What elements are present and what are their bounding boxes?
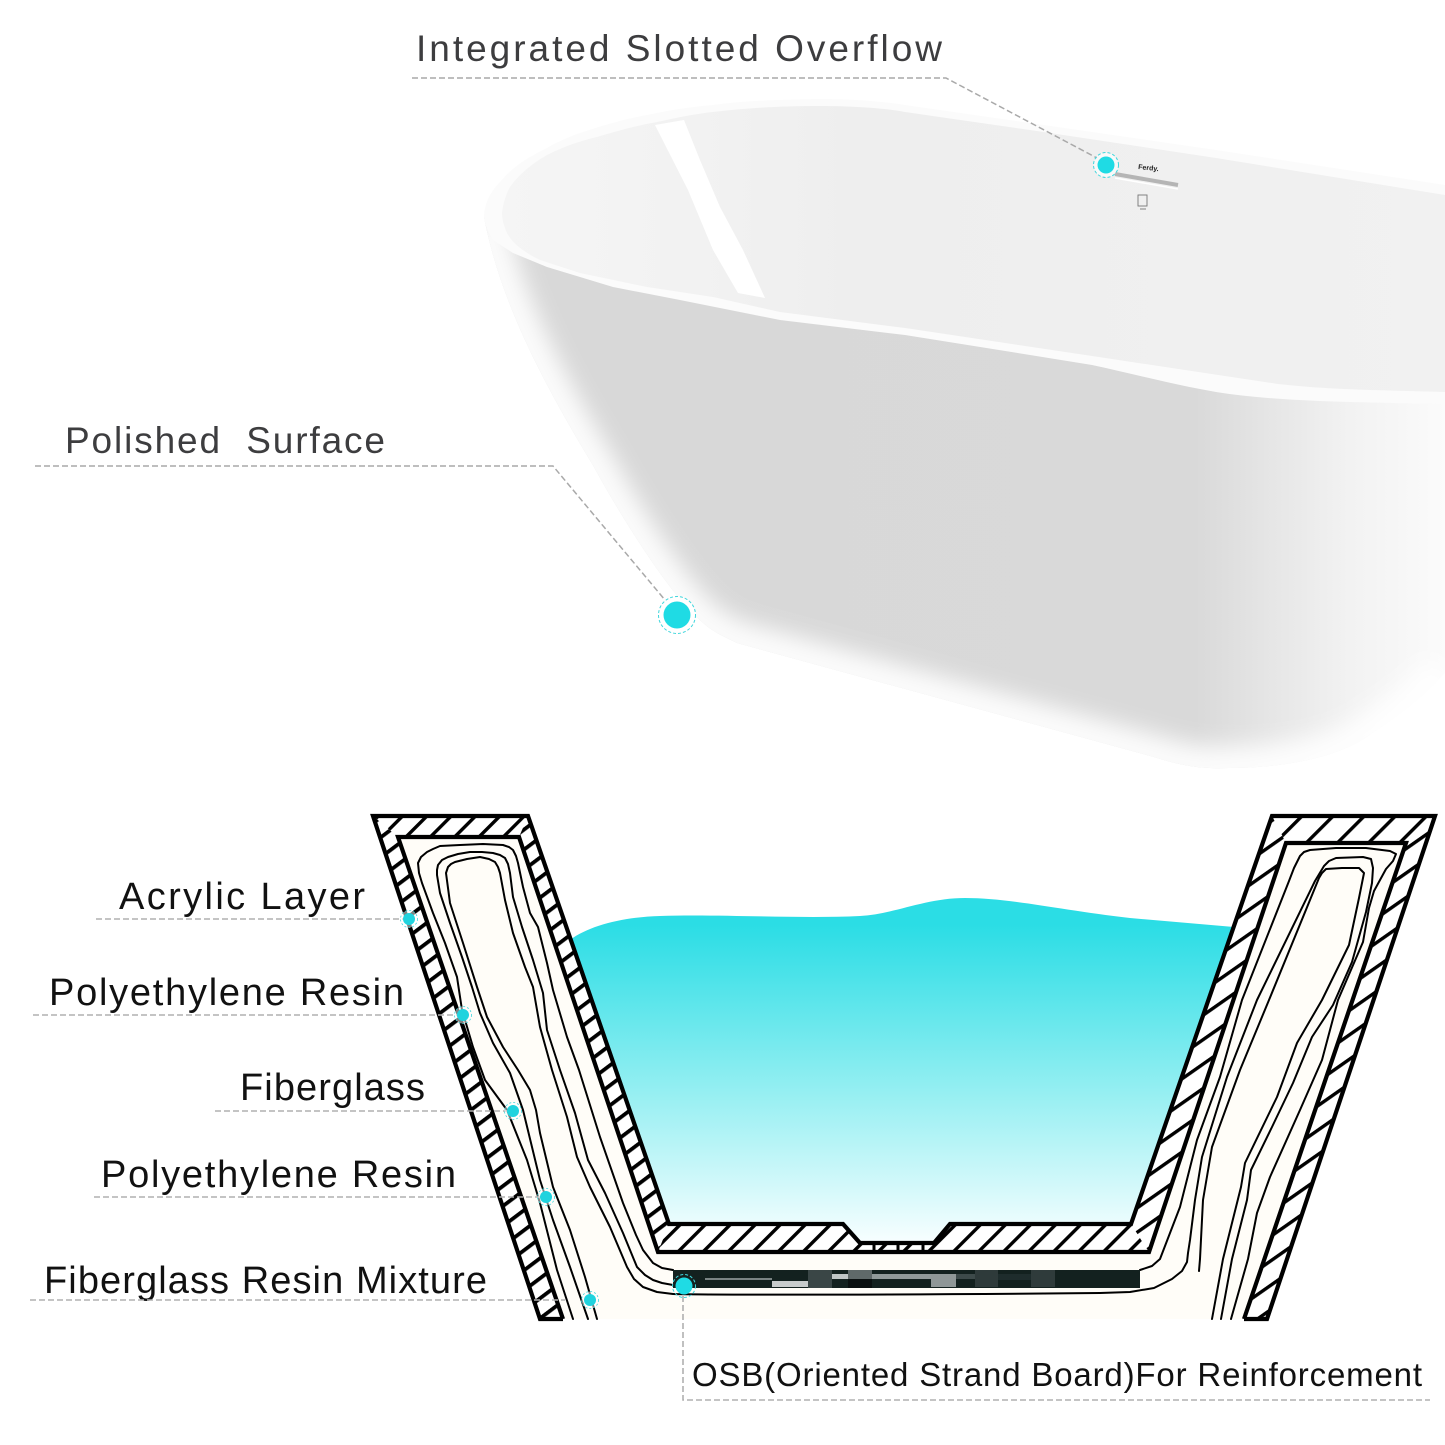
- callout: Integrated Slotted Overflow: [412, 28, 1118, 178]
- label: Acrylic Layer: [119, 876, 365, 918]
- leader line: [30, 1299, 565, 1301]
- label: OSB(Oriented Strand Board)For Reinforcement: [692, 1356, 1422, 1393]
- right wall hatching: [1131, 816, 1435, 1319]
- bathtub photo: [480, 99, 1445, 780]
- marker dot: [504, 1102, 522, 1120]
- leader line: [33, 1014, 458, 1016]
- leader line: [215, 1110, 508, 1112]
- wall outlines: [373, 816, 1435, 1319]
- callout: Polyethylene Resin (upper): [33, 972, 472, 1024]
- right contour lines: [1100, 848, 1396, 1319]
- label: Polished Surface: [65, 420, 385, 461]
- label: Polyethylene Resin: [49, 972, 404, 1014]
- leader line: [412, 78, 1097, 158]
- marker dot: [400, 910, 418, 928]
- bottom hatching: [658, 1224, 1149, 1252]
- cream core: [398, 837, 1406, 1319]
- left contour lines: [418, 844, 673, 1319]
- tub outer body: [486, 225, 1402, 768]
- marker dot: [672, 1274, 696, 1298]
- label: Fiberglass Resin Mixture: [44, 1260, 487, 1302]
- label: Fiberglass: [240, 1067, 425, 1109]
- marker dot: [658, 596, 696, 634]
- cross-section diagram: [373, 816, 1435, 1319]
- marker dot: [538, 1188, 554, 1206]
- label: Polyethylene Resin: [101, 1154, 456, 1196]
- callout: Fiberglass Resin Mixture: [30, 1260, 598, 1308]
- leader line: [683, 1296, 1430, 1400]
- tub rim: [484, 99, 1445, 404]
- callout: Fiberglass: [215, 1067, 522, 1120]
- white highlight stripe: [655, 120, 765, 298]
- leader line: [94, 1196, 541, 1198]
- brand mark: Ferdy.: [1138, 164, 1159, 173]
- callout: Acrylic Layer: [96, 876, 418, 928]
- overflow slot: [1115, 174, 1178, 185]
- marker dot: [454, 1006, 472, 1024]
- leader line: [35, 466, 665, 600]
- tub interior: [502, 106, 1445, 392]
- callout: OSB reinforcement: [672, 1274, 1430, 1400]
- care icon: [1138, 195, 1147, 209]
- water: [570, 898, 1234, 1243]
- callout: Polished Surface: [35, 420, 696, 634]
- label: Integrated Slotted Overflow: [416, 28, 942, 69]
- OSB reinforcement board: [673, 1270, 1140, 1288]
- contour line under board: [673, 1293, 1100, 1295]
- marker dot: [1094, 152, 1118, 178]
- leader line: [96, 918, 404, 920]
- marker dot: [582, 1292, 598, 1308]
- left wall hatching: [373, 816, 669, 1319]
- callout: Polyethylene Resin (lower): [94, 1154, 554, 1206]
